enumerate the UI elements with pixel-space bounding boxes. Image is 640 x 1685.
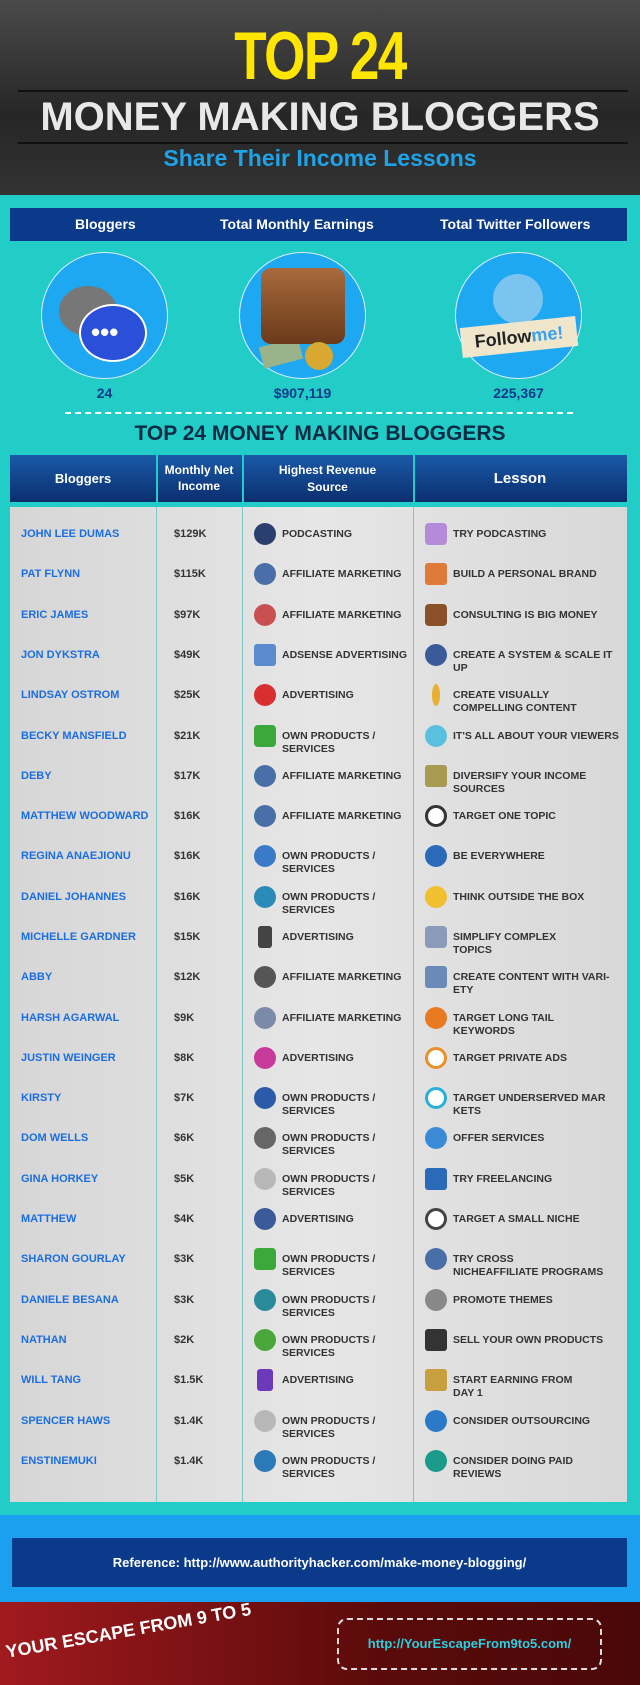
- rows: TRY PODCASTING: [453, 528, 546, 540]
- text: $1.4K: [174, 1415, 203, 1427]
- text: $4K: [174, 1213, 194, 1225]
- stats bar: Bloggers: [75, 216, 136, 232]
- text: SERVICES: [282, 1105, 335, 1117]
- footer: [0, 1602, 640, 1685]
- text: $8K: [174, 1052, 194, 1064]
- stat: bloggers: •••: [91, 317, 118, 347]
- text: DEBY: [21, 770, 52, 782]
- text: $6K: [174, 1132, 194, 1144]
- text: MATTHEW WOODWARD: [21, 810, 148, 822]
- table header: Monthly Net Income: [165, 463, 233, 493]
- text: WILL TANG: [21, 1374, 81, 1386]
- text: ADVERTISING: [282, 1374, 354, 1386]
- text: DANIEL JOHANNES: [21, 891, 126, 903]
- text: $115K: [174, 568, 206, 580]
- text: OWN PRODUCTS /: [282, 891, 375, 903]
- text: TARGET UNDERSERVED MAR: [453, 1092, 605, 1104]
- table: [10, 455, 627, 1502]
- text: AFFILIATE MARKETING: [282, 1012, 401, 1024]
- stats bar: [10, 208, 627, 241]
- text: $16K: [174, 810, 200, 822]
- text: $2K: [174, 1334, 194, 1346]
- text: AFFILIATE MARKETING: [282, 568, 401, 580]
- text: $5K: [174, 1173, 194, 1185]
- text: JUSTIN WEINGER: [21, 1052, 116, 1064]
- subtitle: Share Their Income Lessons: [163, 145, 477, 171]
- stat: followers: [455, 252, 582, 401]
- text: BECKY MANSFIELD: [21, 730, 127, 742]
- text: ERIC JAMES: [21, 609, 88, 621]
- text: $3K: [174, 1294, 194, 1306]
- text: REVIEWS: [453, 1468, 501, 1480]
- text: $25K: [174, 689, 200, 701]
- text: ADVERTISING: [282, 1052, 354, 1064]
- reference box: [12, 1538, 627, 1587]
- text: DOM WELLS: [21, 1132, 88, 1144]
- text: BE EVERYWHERE: [453, 850, 545, 862]
- text: MICHELLE GARDNER: [21, 931, 136, 943]
- text: SERVICES: [282, 1307, 335, 1319]
- rows: JOHN LEE DUMAS: [21, 528, 119, 540]
- text: START EARNING FROM: [453, 1374, 572, 1386]
- text: DIVERSIFY YOUR INCOME: [453, 770, 586, 782]
- reference band: [0, 1515, 640, 1602]
- text: REGINA ANAEJIONU: [21, 850, 131, 862]
- header: [0, 0, 640, 195]
- text: MATTHEW: [21, 1213, 76, 1225]
- text: SHARON GOURLAY: [21, 1253, 126, 1265]
- text: $1.4K: [174, 1455, 203, 1467]
- table body: [10, 507, 627, 1502]
- text: SERVICES: [282, 743, 335, 755]
- footer url box: [337, 1618, 602, 1670]
- text: NICHEAFFILIATE PROGRAMS: [453, 1266, 603, 1278]
- text: OWN PRODUCTS /: [282, 1132, 375, 1144]
- table header: Lesson: [494, 470, 546, 487]
- logo: YOUR ESCAPE FROM 9 TO 5: [4, 1599, 253, 1662]
- text: ADVERTISING: [282, 931, 354, 943]
- rows: $129K: [174, 528, 206, 540]
- text: OWN PRODUCTS /: [282, 1455, 375, 1467]
- text: GINA HORKEY: [21, 1173, 98, 1185]
- text: OWN PRODUCTS /: [282, 1415, 375, 1427]
- text: OWN PRODUCTS /: [282, 1253, 375, 1265]
- stat: bloggers: [41, 252, 168, 401]
- table header: Highest Revenue: [279, 463, 376, 477]
- text: TRY FREELANCING: [453, 1173, 552, 1185]
- text: $7K: [174, 1092, 194, 1104]
- section heading: TOP 24 MONEY MAKING BLOGGERS: [134, 422, 506, 445]
- stat: earnings: [239, 252, 366, 401]
- text: DAY 1: [453, 1387, 483, 1399]
- text: BUILD A PERSONAL BRAND: [453, 568, 597, 580]
- text: TARGET PRIVATE ADS: [453, 1052, 567, 1064]
- text: SERVICES: [282, 904, 335, 916]
- text: $16K: [174, 891, 200, 903]
- text: THINK OUTSIDE THE BOX: [453, 891, 584, 903]
- text: OFFER SERVICES: [453, 1132, 544, 1144]
- text: AFFILIATE MARKETING: [282, 971, 401, 983]
- text: SERVICES: [282, 1186, 335, 1198]
- text: PAT FLYNN: [21, 568, 80, 580]
- text: PROMOTE THEMES: [453, 1294, 553, 1306]
- text: OWN PRODUCTS /: [282, 1092, 375, 1104]
- text: JON DYKSTRA: [21, 649, 100, 661]
- rows: PODCASTING: [282, 528, 352, 540]
- text: CONSIDER DOING PAID: [453, 1455, 573, 1467]
- text: $15K: [174, 931, 200, 943]
- title: money making bloggers: MONEY MAKING BLOGGERS: [40, 95, 600, 139]
- text: OWN PRODUCTS /: [282, 730, 375, 742]
- text: KETS: [453, 1105, 481, 1117]
- text: SERVICES: [282, 1468, 335, 1480]
- text: CREATE VISUALLY: [453, 689, 549, 701]
- text: OWN PRODUCTS /: [282, 1334, 375, 1346]
- text: IT'S ALL ABOUT YOUR VIEWERS: [453, 730, 619, 742]
- text: COMPELLING CONTENT: [453, 702, 577, 714]
- icon: wallet: [259, 337, 303, 369]
- text: UP: [453, 662, 468, 674]
- stat: bloggers: 24: [97, 385, 112, 401]
- stat: earnings: $907,119: [274, 385, 331, 401]
- text: CONSULTING IS BIG MONEY: [453, 609, 597, 621]
- text: CONSIDER OUTSOURCING: [453, 1415, 590, 1427]
- stats bar: Total Twitter Followers: [440, 216, 590, 232]
- text: CREATE CONTENT WITH VARI-: [453, 971, 610, 983]
- text: ENSTINEMUKI: [21, 1455, 97, 1467]
- text: ABBY: [21, 971, 52, 983]
- text: SERVICES: [282, 1347, 335, 1359]
- text: $97K: [174, 609, 200, 621]
- icon: chat bubbles: [59, 286, 117, 336]
- text: $9K: [174, 1012, 194, 1024]
- icon: twitter bird: [493, 274, 543, 324]
- text: TARGET ONE TOPIC: [453, 810, 556, 822]
- text: TARGET LONG TAIL: [453, 1012, 554, 1024]
- text: TRY CROSS: [453, 1253, 514, 1265]
- footer url box: http://YourEscapeFrom9to5.com/: [368, 1636, 571, 1651]
- text: DANIELE BESANA: [21, 1294, 119, 1306]
- text: $1.5K: [174, 1374, 203, 1386]
- text: ADVERTISING: [282, 689, 354, 701]
- stats bar: Total Monthly Earnings: [220, 216, 374, 232]
- text: KEYWORDS: [453, 1025, 515, 1037]
- text: LINDSAY OSTROM: [21, 689, 119, 701]
- text: SELL YOUR OWN PRODUCTS: [453, 1334, 603, 1346]
- stat: followers: 225,367: [493, 385, 544, 401]
- text: SERVICES: [282, 1145, 335, 1157]
- text: TARGET A SMALL NICHE: [453, 1213, 580, 1225]
- text: $21K: [174, 730, 200, 742]
- text: AFFILIATE MARKETING: [282, 770, 401, 782]
- text: NATHAN: [21, 1334, 67, 1346]
- table header: [10, 455, 627, 502]
- text: $16K: [174, 850, 200, 862]
- rows: [21, 523, 546, 545]
- text: $3K: [174, 1253, 194, 1265]
- text: CREATE A SYSTEM & SCALE IT: [453, 649, 612, 661]
- text: OWN PRODUCTS /: [282, 1294, 375, 1306]
- text: SOURCES: [453, 783, 505, 795]
- text: ADVERTISING: [282, 1213, 354, 1225]
- title: top 24: TOP 24: [234, 18, 406, 94]
- text: SPENCER HAWS: [21, 1415, 110, 1427]
- table header: Source: [307, 480, 348, 494]
- text: KIRSTY: [21, 1092, 61, 1104]
- reference box: Reference: http://www.authorityhacker.com/make-money-blogging/: [113, 1555, 526, 1570]
- text: $12K: [174, 971, 200, 983]
- text: AFFILIATE MARKETING: [282, 609, 401, 621]
- text: OWN PRODUCTS /: [282, 850, 375, 862]
- text: OWN PRODUCTS /: [282, 1173, 375, 1185]
- text: ETY: [453, 984, 473, 996]
- stat: followers: Followme!: [474, 322, 564, 352]
- text: ADSENSE ADVERTISING: [282, 649, 407, 661]
- text: $49K: [174, 649, 200, 661]
- text: AFFILIATE MARKETING: [282, 810, 401, 822]
- text: SIMPLIFY COMPLEX: [453, 931, 556, 943]
- table header: Bloggers: [55, 471, 111, 486]
- text: SERVICES: [282, 1428, 335, 1440]
- text: TOPICS: [453, 944, 492, 956]
- text: SERVICES: [282, 863, 335, 875]
- text: $17K: [174, 770, 200, 782]
- text: HARSH AGARWAL: [21, 1012, 119, 1024]
- text: SERVICES: [282, 1266, 335, 1278]
